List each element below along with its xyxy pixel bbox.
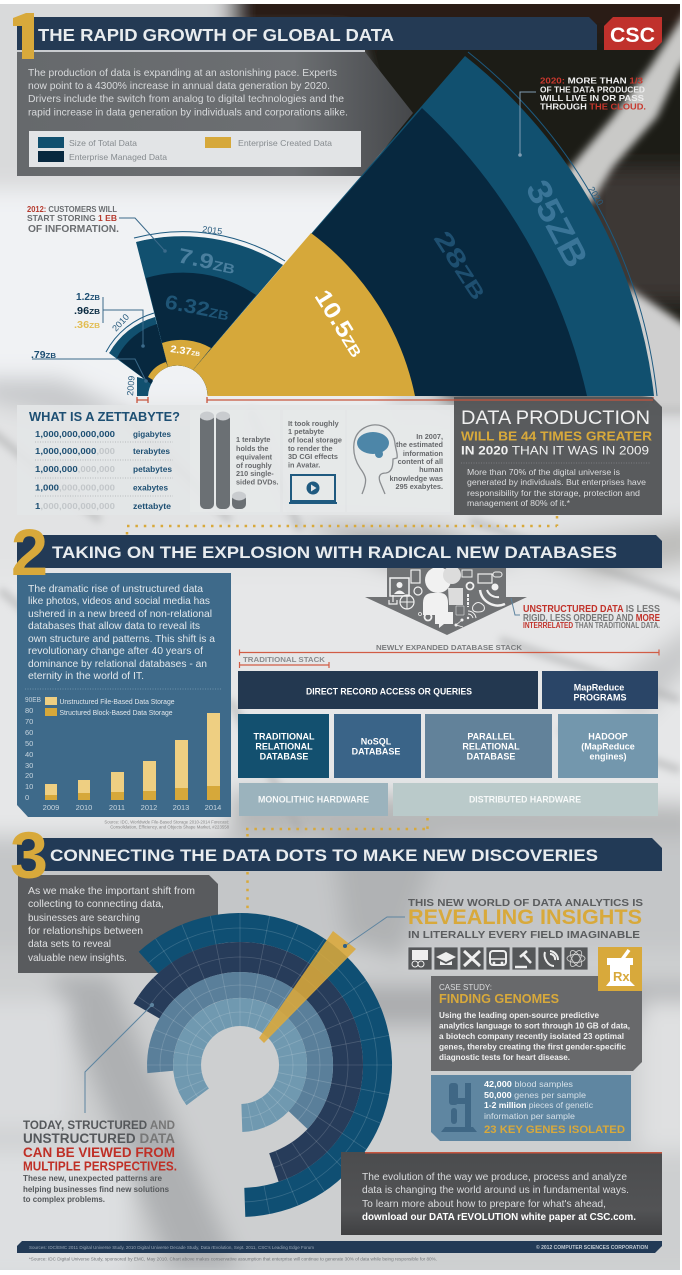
callout: unstructured data: UNSTRUCTURED DATA IS LESS bbox=[523, 604, 660, 615]
panel: connecting data text: for relationships between bbox=[28, 925, 143, 937]
stack labels: MapReduce bbox=[574, 682, 624, 692]
panel: relational text and chart bbox=[17, 573, 231, 817]
icon: phone bbox=[545, 951, 558, 966]
zettabyte table: 1,000 ,000,000,000 bbox=[35, 482, 115, 492]
chart legend: Structured Block-Based Data Storage bbox=[60, 708, 172, 717]
callout: unstructured data bbox=[511, 598, 660, 630]
DVD text bbox=[236, 435, 279, 486]
zettabyte table: zettabyte bbox=[133, 501, 171, 511]
icon: gavel bbox=[515, 951, 531, 967]
panel body text: revolutionary change after 40 years of bbox=[28, 645, 203, 657]
intro text bbox=[28, 68, 348, 118]
case study panel: FINDING GENOMES bbox=[439, 991, 559, 1006]
panel body text bbox=[28, 583, 215, 682]
wedge values: 10.5ZB bbox=[310, 285, 371, 362]
callout: 2010 values: 1.2ZB bbox=[76, 292, 101, 303]
DVD text: 1 terabyte bbox=[236, 435, 270, 444]
icon: Rx mortar: Rx bbox=[613, 969, 630, 984]
zettabyte table: 1,000,000,000,000 bbox=[35, 501, 115, 511]
2015 wedge bbox=[134, 232, 285, 370]
year labels: 2009 bbox=[125, 375, 137, 396]
stack brackets bbox=[240, 643, 659, 668]
bar chart: 2012 bbox=[141, 803, 157, 812]
callout: 2010 values: .96ZB bbox=[74, 306, 101, 317]
panel: connecting data text: data sets to reveal bbox=[28, 938, 111, 950]
stack brackets: TRADITIONAL STACK bbox=[243, 655, 326, 664]
footer bar: Sources: IDC/EMC 2011 Digital Universe Study, 2010 Digital Universe Decade Study, Data rEvolution, Sept. 2011, CSC's Leading Edge Forum bbox=[29, 1245, 314, 1251]
wedge values bbox=[163, 174, 595, 362]
case study panel: CASE STUDY: bbox=[439, 982, 492, 992]
stack labels: DATABASE bbox=[352, 746, 400, 756]
stack labels: RELATIONAL bbox=[255, 742, 313, 752]
callout: multiple perspectives: UNSTRUCTURED DATA bbox=[23, 1131, 175, 1146]
bar chart: 70 bbox=[25, 717, 33, 726]
zettabyte table: terabytes bbox=[133, 446, 170, 456]
DVD text: holds the bbox=[236, 444, 268, 453]
callout: 2009 value: .79ZB bbox=[31, 350, 57, 361]
panel: connecting data text: businesses are searching bbox=[28, 912, 140, 924]
concentric data rings bbox=[134, 913, 392, 1217]
exabytes text: knowledge was bbox=[389, 474, 443, 483]
stack labels: RELATIONAL bbox=[462, 742, 520, 752]
bar chart: 60 bbox=[25, 728, 33, 737]
stack labels: engines) bbox=[589, 752, 627, 762]
revealing insights heading: THIS NEW WORLD OF DATA ANALYTICS IS bbox=[408, 897, 643, 909]
title 3: CONNECTING THE DATA DOTS TO MAKE NEW DISCOVERIES bbox=[50, 846, 598, 865]
header 1 bbox=[13, 13, 597, 59]
footer bar bbox=[17, 1241, 662, 1253]
2009 wedge bbox=[137, 377, 153, 396]
bar chart: 30 bbox=[25, 761, 33, 770]
stack labels: HADOOP bbox=[588, 732, 628, 742]
stack labels bbox=[254, 682, 635, 804]
genes stats panel: 23 KEY GENES ISOLATED bbox=[484, 1124, 625, 1136]
callout: multiple perspectives: CAN BE VIEWED FROM bbox=[23, 1145, 175, 1160]
year labels: 2015 bbox=[202, 224, 223, 236]
genes stats text bbox=[484, 1079, 594, 1121]
bar chart bbox=[25, 695, 221, 812]
bar chart: 10 bbox=[25, 782, 33, 791]
stack blocks bbox=[238, 671, 538, 709]
panel: connecting data text: valuable new insights. bbox=[28, 952, 127, 964]
stack labels: DIRECT RECORD ACCESS OR QUERIES bbox=[306, 686, 472, 696]
callout: cloud 2020: WILL LIVE IN OR PASS bbox=[540, 94, 645, 103]
zettabyte panel bbox=[17, 405, 454, 515]
callout: multiple perspectives: helping businesses find new solutions bbox=[23, 1184, 169, 1194]
data production text: More than 70% of the digital universe is bbox=[467, 467, 620, 477]
legend: Enterprise Created Data bbox=[238, 138, 332, 148]
Avatar text bbox=[288, 419, 342, 470]
genes stats panel bbox=[431, 1075, 631, 1141]
CSC logo: CSC bbox=[610, 24, 655, 47]
year labels: 2010 bbox=[110, 312, 131, 333]
bar chart: 40 bbox=[25, 750, 33, 759]
data production panel: IN 2020 THAN IT WAS IN 2009 bbox=[461, 444, 649, 458]
chart source: Source: IDC, Worldwide File-Based Storage 2010-2014 Forecast: bbox=[104, 820, 229, 824]
wedge values: 35ZB bbox=[518, 174, 595, 274]
callout: 2010 values: .36ZB bbox=[74, 320, 101, 331]
growth fan chart bbox=[106, 52, 657, 396]
data production text bbox=[467, 467, 646, 508]
callout: multiple perspectives: TODAY, STRUCTURED AND bbox=[23, 1120, 175, 1132]
header 2 bbox=[11, 515, 662, 589]
panel body text: dominance by relational databases - an bbox=[28, 658, 207, 670]
exabytes text: information bbox=[403, 449, 443, 458]
callout: cloud 2020: THROUGH THE CLOUD. bbox=[540, 102, 646, 111]
bar chart: 2009 bbox=[43, 803, 59, 812]
bar chart: 2010 bbox=[76, 803, 92, 812]
callout: cloud 2020: 2020: MORE THAN 1/3 bbox=[540, 76, 644, 86]
yellow insight wedge bbox=[259, 931, 356, 1043]
intro text: The production of data is expanding at an astonishing pace. Experts bbox=[28, 68, 337, 79]
callout: 2012: OF INFORMATION. bbox=[28, 223, 119, 235]
data production heading: DATA PRODUCTION bbox=[461, 407, 650, 429]
revealing insights heading: IN LITERALLY EVERY FIELD IMAGINABLE bbox=[408, 929, 640, 941]
footnote: *Source: IDC Digital Universe Study, sponsored by EMC, May 2010. Chart above makes conservative assumption that enterprise will continue to generate 30% of data while being responsible for 80%. bbox=[29, 1256, 437, 1262]
zettabyte table: exabytes bbox=[133, 482, 168, 492]
case study panel: genes, thereby creating the first gender-specific bbox=[439, 1042, 626, 1052]
legend: Enterprise Managed Data bbox=[69, 152, 167, 162]
genes stats text: 42,000 blood samples bbox=[484, 1079, 574, 1089]
icon: screen bbox=[289, 475, 337, 503]
stack labels: DATABASE bbox=[260, 752, 308, 762]
legend bbox=[29, 131, 361, 167]
closing panel: The evolution of the way we produce, process and analyze bbox=[362, 1171, 627, 1183]
title 1: THE RAPID GROWTH OF GLOBAL DATA bbox=[38, 25, 394, 45]
Avatar text: of local storage bbox=[288, 436, 342, 444]
panel body text: own structure and patterns. This shift is a bbox=[28, 633, 215, 645]
DVD text: of roughly bbox=[236, 461, 273, 470]
revealing insights heading: REVEALING INSIGHTS bbox=[408, 906, 642, 929]
genes stats text: 50,000 genes per sample bbox=[484, 1090, 586, 1100]
icon: graduation cap bbox=[436, 952, 456, 965]
wedge values: 2.37ZB bbox=[170, 344, 202, 359]
callout: multiple perspectives: These new, unexpected patterns are bbox=[23, 1173, 162, 1183]
stack labels: (MapReduce bbox=[581, 742, 635, 752]
callout: unstructured data: RIGID, LESS ORDERED AND MORE bbox=[523, 613, 660, 624]
case study panel: Using the leading open-source predictive bbox=[439, 1011, 599, 1020]
stack labels: DATABASE bbox=[467, 752, 515, 762]
zettabyte table bbox=[35, 429, 173, 511]
zettabyte table: petabytes bbox=[133, 464, 172, 474]
intro text: rapid increase in data generation by individuals and corporations alike. bbox=[28, 108, 348, 118]
data production panel bbox=[454, 397, 662, 515]
callout: multiple perspectives: to complex problems. bbox=[23, 1194, 105, 1204]
exabytes text bbox=[389, 432, 443, 491]
ring: third bbox=[147, 972, 333, 1129]
chart source: Consolidation, Efficiency, and Objects Shape Market, #223558 bbox=[110, 824, 230, 830]
panel: connecting data text: collecting to connecting data, bbox=[28, 898, 164, 910]
exabytes text: In 2007, bbox=[416, 432, 443, 441]
closing panel: download our DATA rEVOLUTION white paper at CSC.com. bbox=[362, 1211, 636, 1223]
database stack bbox=[238, 643, 659, 816]
icon: DVD stacks bbox=[200, 412, 246, 509]
case study panel: analytics language to sort through 10 GB of data, bbox=[439, 1022, 630, 1030]
ring: inner bbox=[173, 998, 307, 1132]
number 2: 2 bbox=[11, 515, 48, 589]
stack labels: TRADITIONAL bbox=[254, 732, 315, 742]
bar chart: 2014 bbox=[205, 803, 221, 812]
callout: cloud 2020: OF THE DATA PRODUCED bbox=[540, 85, 645, 94]
bar chart: 2013 bbox=[173, 803, 189, 812]
icon: bus bbox=[490, 951, 506, 965]
zettabyte table: gigabytes bbox=[133, 429, 171, 439]
genes stats text: 1-2 million pieces of genetic bbox=[484, 1100, 594, 1110]
icon: Rx mortar bbox=[598, 947, 642, 991]
stack labels: DISTRIBUTED HARDWARE bbox=[469, 794, 581, 804]
connector dots 2-3 bbox=[246, 818, 428, 915]
case study panel: diagnostic tests for heart disease. bbox=[439, 1053, 570, 1062]
icon: tools bbox=[464, 951, 480, 966]
panel: connecting data text: As we make the important shift from bbox=[28, 885, 195, 897]
year labels: 2020 bbox=[586, 185, 605, 207]
bar chart: 50 bbox=[25, 739, 33, 748]
data production text: responsibility for the storage, protection and bbox=[467, 488, 640, 498]
callout: multiple perspectives bbox=[23, 1003, 177, 1204]
icon: atom bbox=[567, 949, 585, 968]
ring: second bbox=[134, 942, 363, 1182]
callout: 2009 value bbox=[31, 350, 148, 383]
DVD text: equivalent bbox=[236, 452, 273, 462]
panel: connecting data text bbox=[18, 875, 218, 973]
bar chart: 90EB bbox=[25, 695, 41, 704]
bar chart: 0 bbox=[25, 793, 29, 802]
CSC logo bbox=[604, 17, 662, 50]
footer bar: © 2012 COMPUTER SCIENCES CORPORATION bbox=[536, 1244, 648, 1251]
ring: outer bbox=[139, 913, 392, 1217]
stack brackets: NEWLY EXPANDED DATABASE STACK bbox=[376, 643, 523, 652]
zettabyte table: 1,000,000 ,000,000 bbox=[35, 464, 115, 474]
callout: insights leader bbox=[343, 917, 405, 948]
callout: unstructured data: INTERRELATED THAN TRADITIONAL DATA. bbox=[523, 621, 660, 630]
bar chart: 2011 bbox=[109, 803, 125, 812]
icon: unstructured data arrow bbox=[365, 565, 527, 635]
Avatar text: 3D CGI effects bbox=[288, 452, 338, 461]
intro text: Drivers include the switch from analog to digital technologies and the bbox=[28, 94, 344, 105]
legend: Size of Total Data bbox=[69, 138, 137, 148]
chart legend: Unstructured File-Based Data Storage bbox=[60, 697, 174, 706]
Avatar text: in Avatar. bbox=[288, 460, 320, 470]
Avatar text: 1 petabyte bbox=[288, 427, 324, 436]
data production panel: WILL BE 44 TIMES GREATER bbox=[461, 428, 653, 444]
chart legend bbox=[45, 697, 174, 717]
2010 wedge bbox=[106, 313, 168, 384]
connector dots 1-2 bbox=[127, 516, 557, 536]
section 1 intro panel bbox=[17, 52, 413, 176]
bar chart: 20 bbox=[25, 771, 33, 780]
callout: 2012 bbox=[27, 204, 167, 253]
DVD text: 210 single- bbox=[236, 469, 274, 478]
panel body text: ushered in a new breed of non-relational bbox=[28, 608, 212, 620]
data production text: generated by individuals. But enterprises have bbox=[467, 477, 646, 487]
panel body text: eternity in the world of IT. bbox=[28, 670, 144, 682]
zettabyte heading: WHAT IS A ZETTABYTE? bbox=[29, 410, 180, 424]
callout: 2010 values bbox=[74, 292, 145, 348]
field icons bbox=[408, 947, 588, 970]
Avatar text: to render the bbox=[288, 444, 333, 453]
panel body text: like photos, videos and social media has bbox=[28, 595, 210, 607]
panel body text: databases that allow data to reveal its bbox=[28, 620, 200, 632]
genes stats text: information per sample bbox=[484, 1111, 575, 1121]
2020 wedge bbox=[193, 52, 657, 396]
stack labels: MONOLITHIC HARDWARE bbox=[258, 794, 369, 804]
title 2: TAKING ON THE EXPLOSION WITH RADICAL NEW DATABASES bbox=[52, 543, 617, 562]
axis brackets bbox=[137, 397, 653, 403]
DVD text: sided DVDs. bbox=[236, 478, 279, 486]
exabytes text: content of all bbox=[398, 457, 443, 466]
icon: head with brain bbox=[354, 425, 397, 494]
stack labels: NoSQL bbox=[361, 736, 392, 746]
chart source bbox=[104, 820, 230, 830]
callout: 2012: START STORING 1 EB bbox=[27, 213, 117, 223]
callout: multiple perspectives: MULTIPLE PERSPECTIVES. bbox=[23, 1160, 177, 1174]
stack labels: PARALLEL bbox=[467, 732, 515, 742]
number 1 bbox=[13, 13, 34, 59]
panel body text: The dramatic rise of unstructured data bbox=[28, 583, 203, 595]
bar chart: 80 bbox=[25, 706, 33, 715]
closing panel: data is changing the world around us in fundamental ways. bbox=[362, 1184, 629, 1196]
zettabyte table: 1,000,000,000 ,000 bbox=[35, 446, 115, 456]
icon: microscope bbox=[441, 1083, 477, 1132]
number 3: 3 bbox=[10, 818, 48, 892]
exabytes text: 295 exabytes. bbox=[396, 482, 443, 491]
data production text: management of 80% of it.* bbox=[467, 498, 571, 508]
wedge values: 7.9ZB bbox=[176, 244, 238, 279]
exabytes text: human bbox=[419, 465, 443, 474]
year labels bbox=[110, 185, 605, 396]
case study panel: a biotech company recently isolated 23 optimal bbox=[439, 1032, 624, 1041]
wedge values: 6.32ZB bbox=[163, 291, 231, 325]
case study panel bbox=[431, 976, 642, 1071]
intro text: now point to a 4300% increase in annual data generation by 2020. bbox=[28, 81, 330, 92]
exabytes text: the estimated bbox=[396, 440, 443, 449]
zettabyte table: 1,000,000,000,000 bbox=[35, 429, 115, 439]
revealing insights heading bbox=[408, 897, 643, 941]
closing panel bbox=[341, 1152, 662, 1235]
wedge values: 28ZB bbox=[428, 226, 493, 305]
closing panel: To learn more about how to prepare for what's ahead, bbox=[362, 1198, 606, 1210]
callout: cloud 2020 bbox=[518, 76, 646, 157]
Avatar text: It took roughly bbox=[288, 419, 340, 428]
header 3 bbox=[10, 818, 662, 892]
stack labels: PROGRAMS bbox=[573, 692, 627, 702]
callout: 2012: 2012: CUSTOMERS WILL bbox=[27, 204, 117, 214]
icon: documents bbox=[412, 950, 428, 967]
